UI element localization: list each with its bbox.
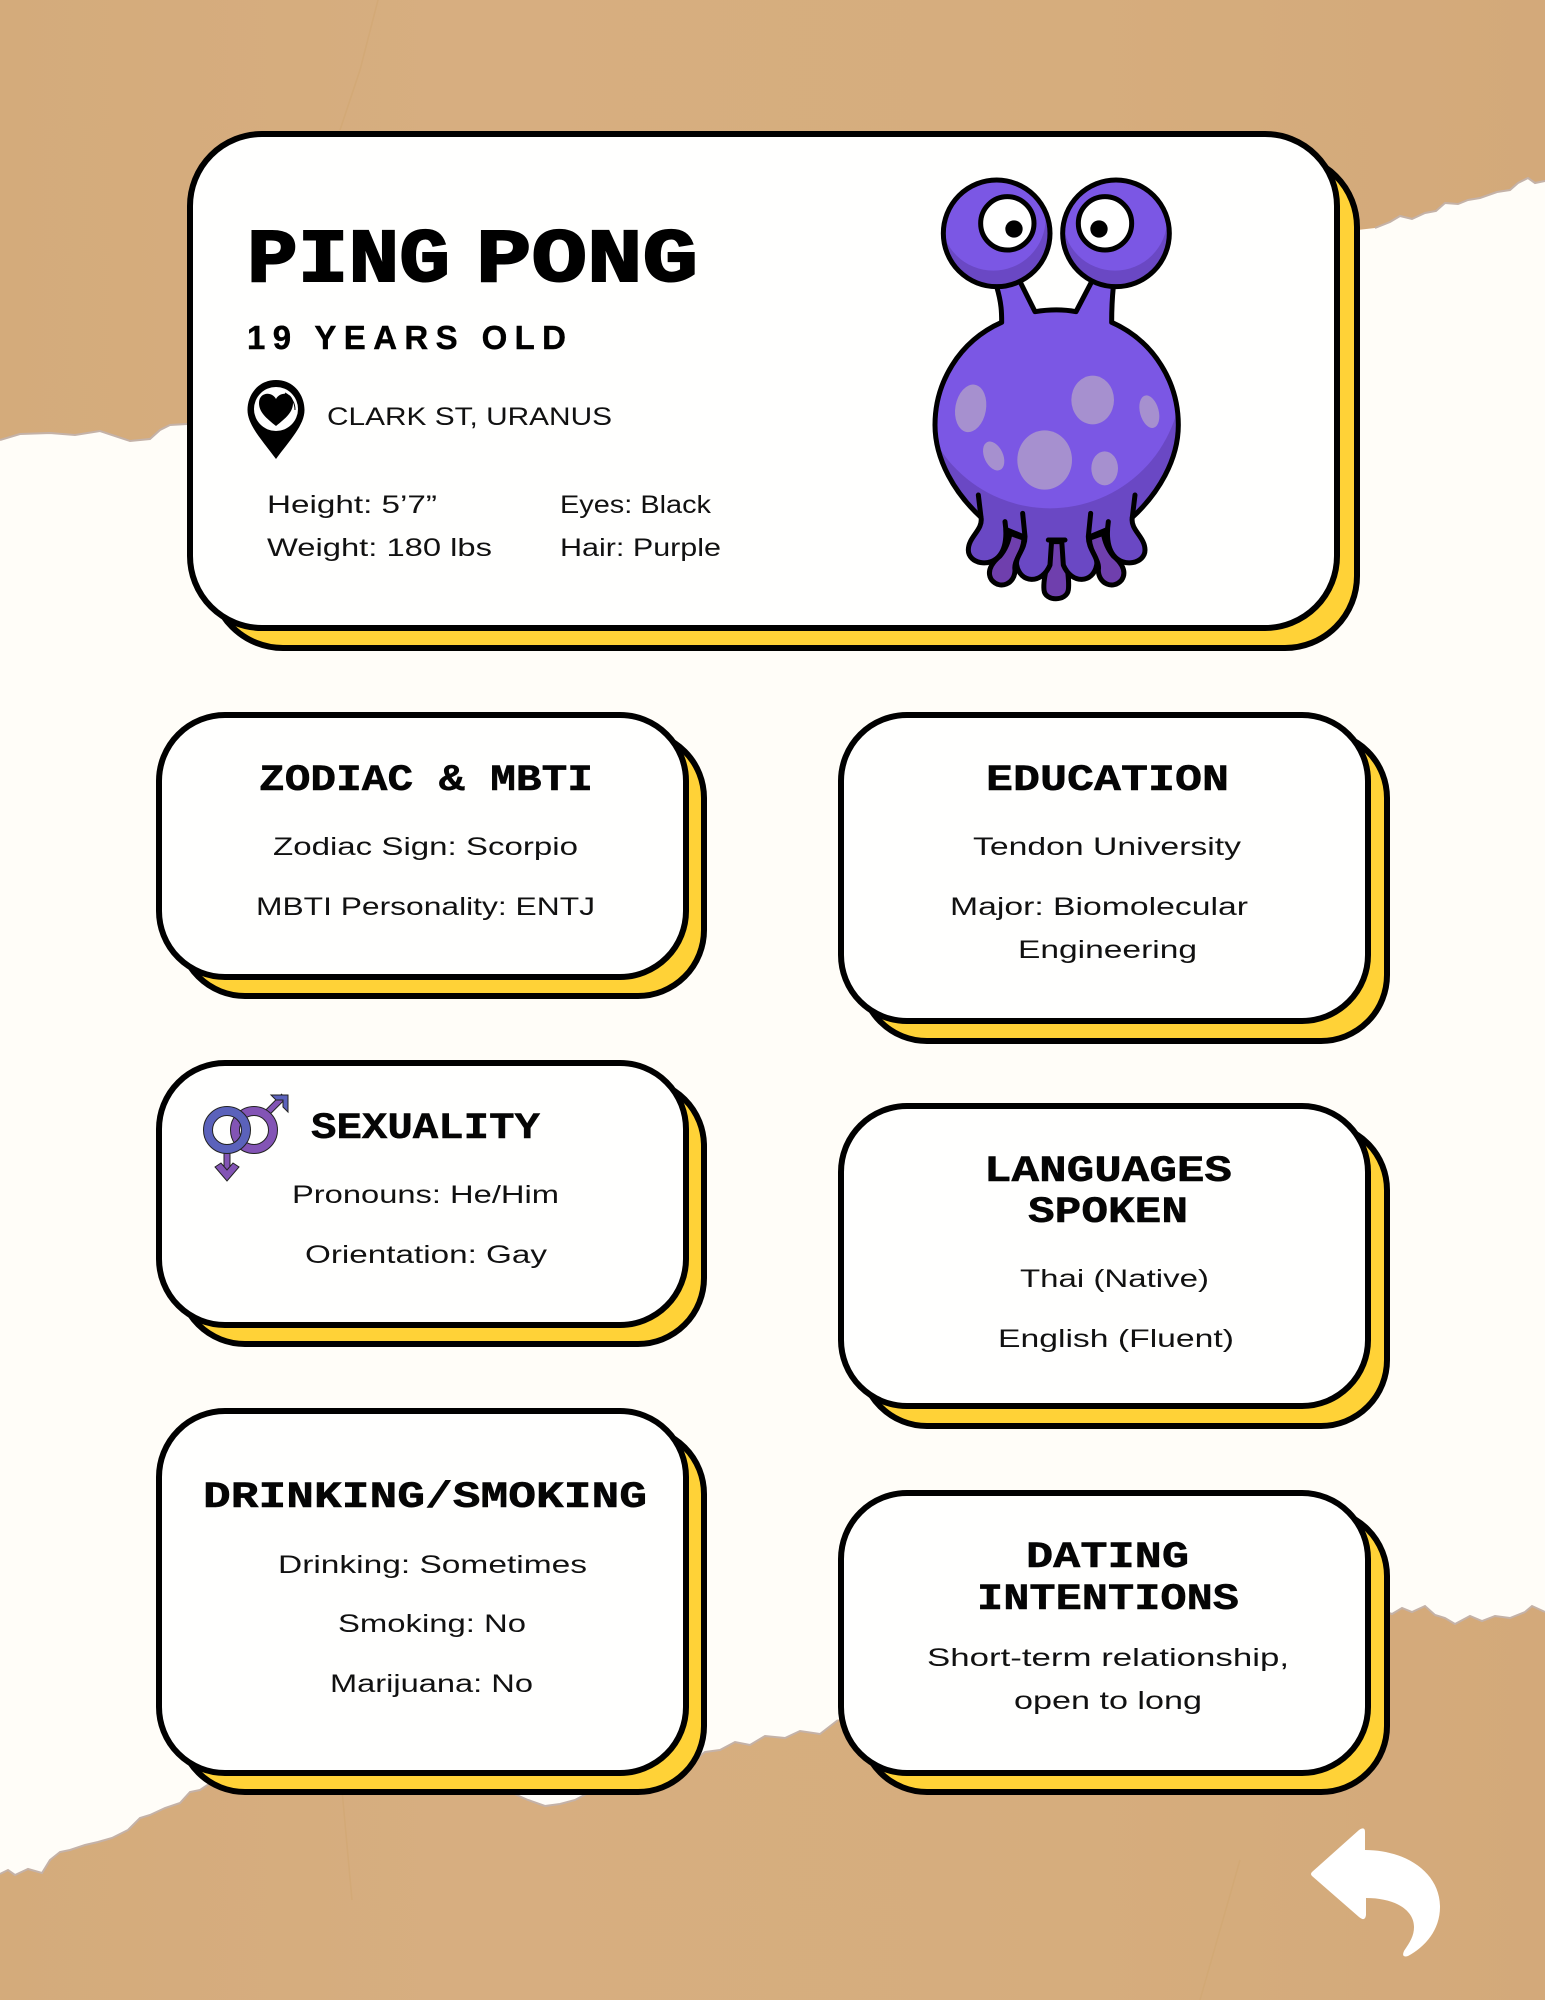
text: smoking: Smoking: No xyxy=(338,1610,526,1638)
text: hair: Hair: Purple xyxy=(560,534,721,562)
icon: location pin with heart xyxy=(248,380,304,459)
text: short-term: Short-term relationship, xyxy=(927,1644,1289,1672)
text: height: Height: 5’7” xyxy=(267,491,437,519)
heading: name: PING xyxy=(247,218,450,304)
heading: sexuality: SEXUALITY xyxy=(311,1108,541,1150)
text: MBTI personality: MBTI Personality: ENTJ xyxy=(256,893,595,921)
heading: languages: LANGUAGES xyxy=(984,1151,1232,1193)
panel: languages spoken xyxy=(841,1106,1387,1426)
panel: sexuality xyxy=(159,1063,704,1344)
icon: white back arrow xyxy=(1311,1828,1440,1956)
text: eyes: Eyes: Black xyxy=(560,491,712,519)
text: major: Major: Biomolecular xyxy=(950,893,1248,921)
heading: intentions: INTENTIONS xyxy=(977,1579,1239,1621)
panel: zodiac and MBTI xyxy=(159,715,704,996)
heading: education: EDUCATION xyxy=(986,760,1229,802)
text: marijuana: Marijuana: No xyxy=(330,1670,533,1698)
text: pronouns: Pronouns: He/Him xyxy=(292,1181,559,1209)
text: open to long: open to long xyxy=(1014,1687,1202,1715)
heading: zodiac and MBTI: ZODIAC & MBTI xyxy=(259,760,593,802)
text: zodiac sign: Zodiac Sign: Scorpio xyxy=(273,833,578,861)
icon: purple alien monster xyxy=(918,166,1183,599)
heading: spoken: SPOKEN xyxy=(1028,1192,1188,1234)
heading: age: 19 YEARS OLD xyxy=(247,319,566,356)
heading: dating: DATING xyxy=(1026,1537,1189,1579)
icon: interlocked male symbols xyxy=(208,1095,288,1181)
text: English: English (Fluent) xyxy=(998,1325,1234,1353)
panel: education xyxy=(841,715,1387,1041)
text: Thai: Thai (Native) xyxy=(1020,1265,1209,1293)
text: drinking: Drinking: Sometimes xyxy=(278,1551,587,1579)
text: weight: Weight: 180 lbs xyxy=(267,534,492,562)
panel: drinking and smoking xyxy=(159,1411,704,1792)
panel: dating intentions xyxy=(841,1493,1387,1792)
background: torn kraft paper top xyxy=(0,0,1545,441)
heading: drinking and smoking: DRINKING/SMOKING xyxy=(203,1477,647,1519)
text: location: CLARK ST, URANUS xyxy=(327,403,612,431)
panel: hero profile card xyxy=(190,134,1357,648)
text: orientation: Orientation: Gay xyxy=(305,1241,548,1269)
background: torn kraft paper bottom xyxy=(0,1606,1545,2000)
text: university: Tendon University xyxy=(973,833,1242,861)
text: major continued: Engineering xyxy=(1018,936,1197,964)
heading: name: PONG xyxy=(476,218,698,304)
